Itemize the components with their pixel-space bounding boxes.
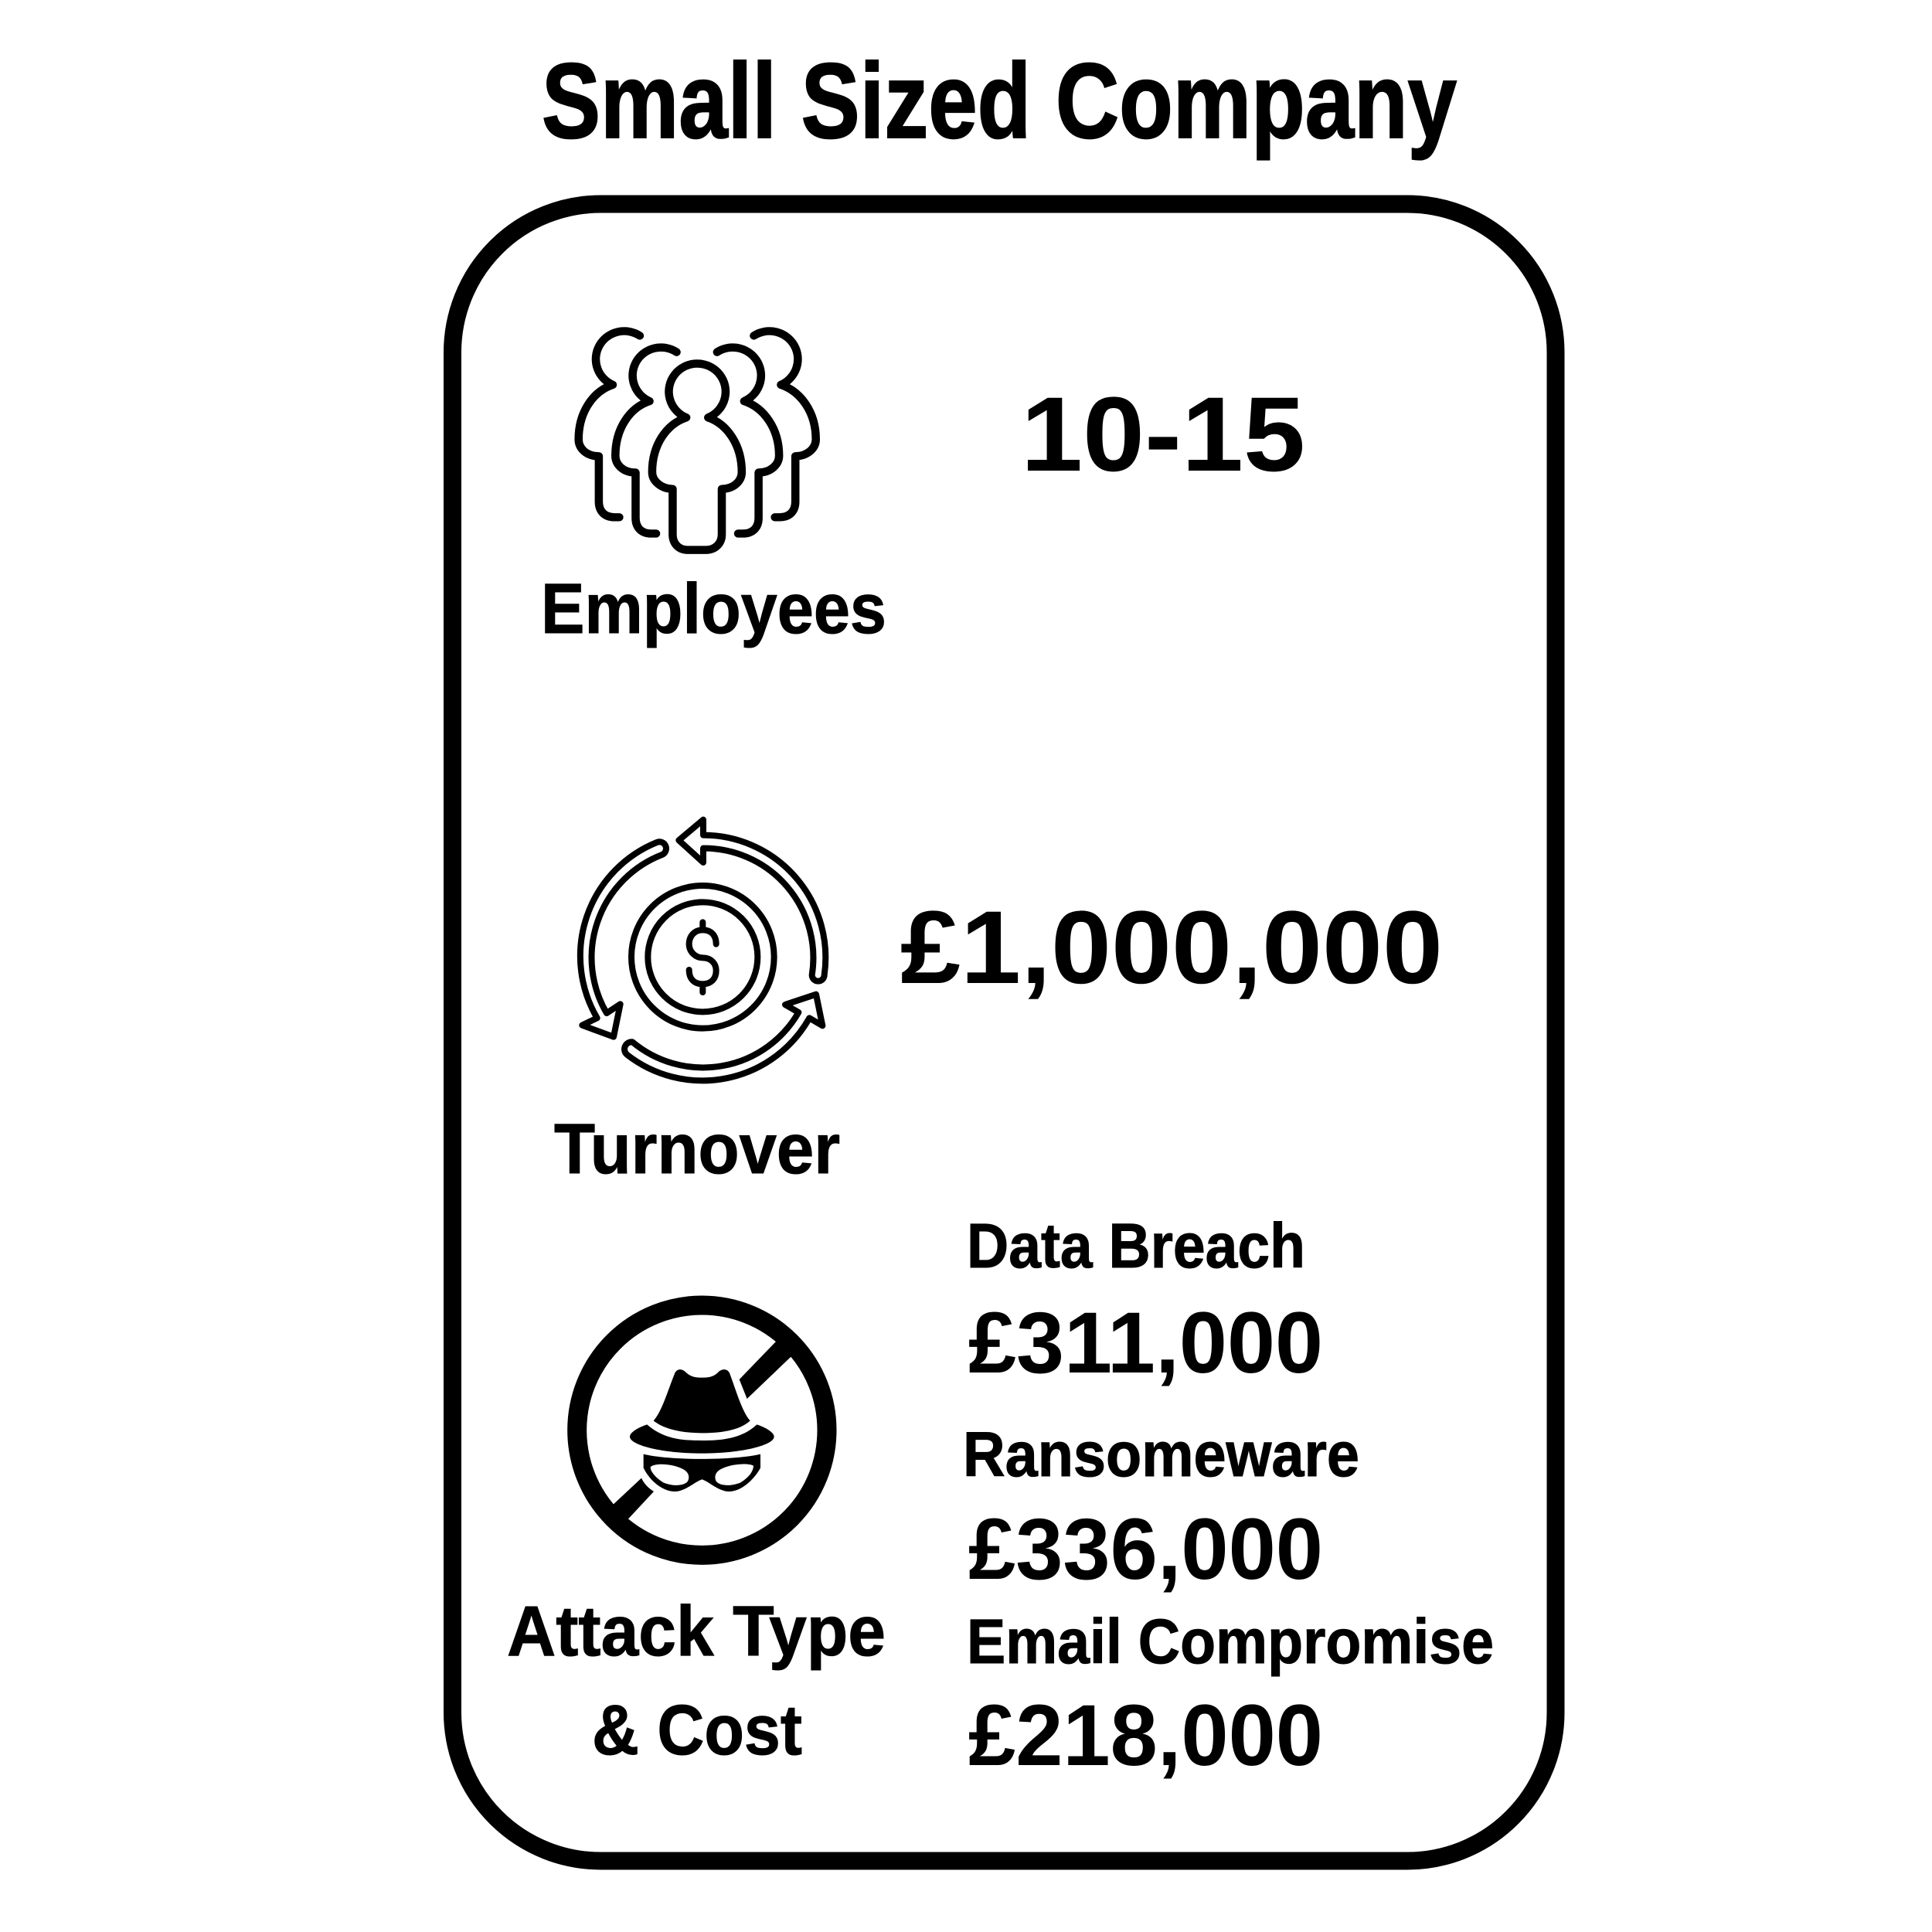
icon: employees group (579, 331, 816, 550)
ransomware cost: £336,000 (968, 1501, 1323, 1597)
ransomware cost: Ransomeware (963, 1420, 1359, 1490)
email compromise cost: £218,000 (968, 1687, 1323, 1784)
attack type label: Attack Type (507, 1592, 886, 1671)
turnover value: £1,000,000 (900, 890, 1443, 1005)
turnover label: Turnover (554, 1110, 840, 1189)
panel: company profile (453, 204, 1556, 1861)
icon: hacker in prohibited sign (577, 1305, 827, 1555)
attack type label: & Cost (592, 1691, 802, 1770)
email compromise cost: Email Compromise (967, 1607, 1494, 1677)
ransomware cost (963, 1420, 1359, 1597)
data breach cost (967, 1211, 1323, 1391)
attack type label (507, 1592, 886, 1770)
data breach cost: Data Breach (967, 1211, 1305, 1281)
employees label: Employees (541, 570, 886, 648)
email compromise cost (967, 1607, 1494, 1784)
icon: money cycle (580, 820, 825, 1080)
data breach cost: £311,000 (968, 1294, 1323, 1391)
employees value: 10-15 (1021, 376, 1305, 494)
title: Small Sized Company (542, 42, 1457, 161)
